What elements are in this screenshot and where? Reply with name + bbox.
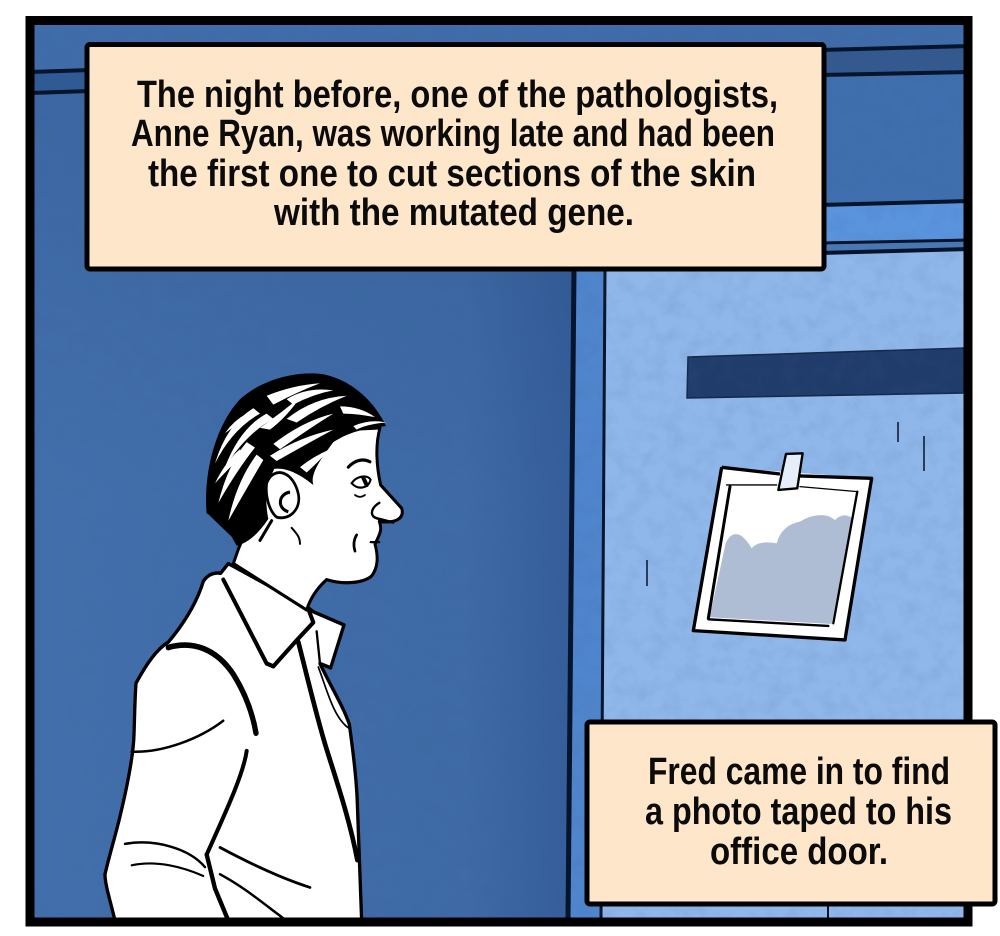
photo outer lines [693,467,872,640]
photo taped to door [693,453,872,640]
inner ear [280,492,290,512]
hair highlights [215,383,386,521]
placket [298,642,357,860]
neck and face [233,428,402,610]
shirt folds [125,580,357,921]
caption text line 2: a photo taped to his [645,791,952,833]
caption box: night before [87,44,824,269]
hair [206,373,386,546]
photo inner lines [708,485,857,626]
tape [778,453,803,490]
door panel [601,250,970,920]
door frame strip [567,250,605,920]
man in profile [105,373,402,921]
door dark sign bar [687,348,964,398]
caption text line 3: the first one to cut sections of the skin [148,153,756,195]
caption text line 2: Anne Ryan, was working late and had been [131,113,775,155]
photo border [693,467,872,640]
sleeve seam [168,645,256,733]
caption text line 3: office door. [710,831,888,873]
shirt [105,564,362,921]
caption box: Fred [587,722,995,904]
upper wall band [30,20,970,205]
caption text line 4: with the mutated gene. [273,192,634,234]
face details [260,460,393,551]
photo tissue shape [710,515,853,624]
wall top shading [30,93,575,493]
caption text line 1: The night before, one of the pathologists, [137,74,778,116]
collar [223,580,313,666]
caption text line 1: Fred came in to find [648,751,950,793]
ear [266,473,299,518]
door top transom [820,201,970,253]
panel background: back wall [30,20,575,920]
